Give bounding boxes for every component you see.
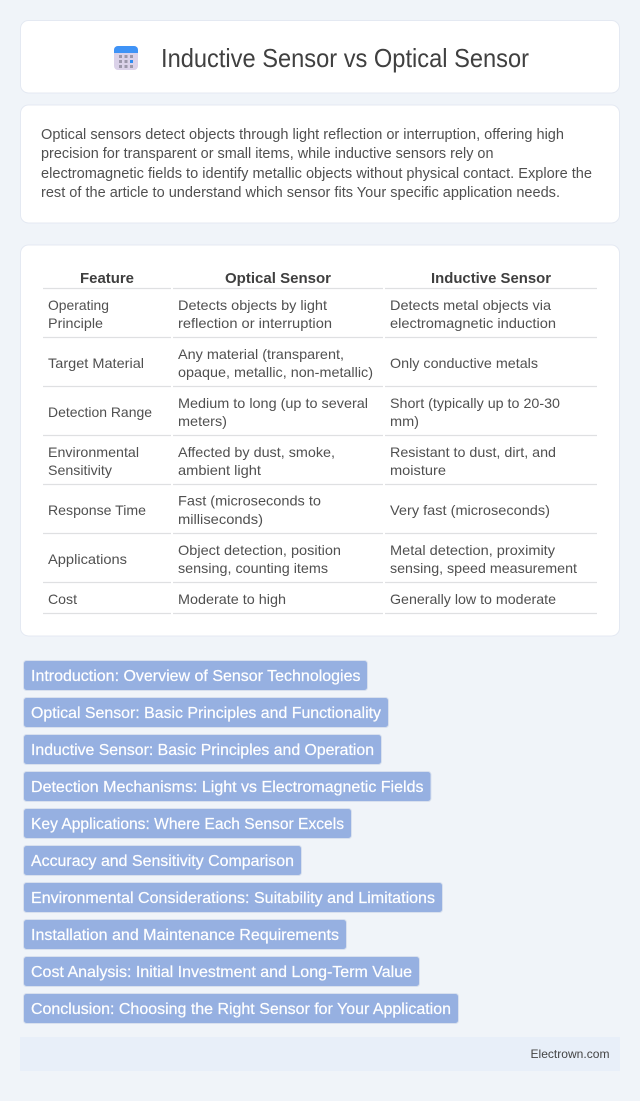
- panel: comparison table: [20, 245, 620, 636]
- row: detection range: Medium to long (up to several: [178, 395, 368, 411]
- row: target material: opaque, metallic, non-metallic): [178, 364, 373, 380]
- table header: Optical Sensor: [225, 270, 331, 287]
- button: accuracy: Accuracy and Sensitivity Comparison: [31, 853, 294, 870]
- table header: Inductive Sensor: [431, 270, 551, 287]
- button: cost analysis: [24, 956, 420, 986]
- row: operating principle: [48, 297, 556, 331]
- row: cost: Moderate to high: [178, 591, 286, 607]
- row: detection range: meters): [178, 413, 227, 429]
- row: environmental sensitivity: ambient light: [178, 462, 261, 478]
- button: installation: Installation and Maintenance Requirements: [31, 927, 339, 944]
- row: applications: sensing, counting items: [178, 560, 328, 576]
- row: applications: Metal detection, proximity: [390, 542, 555, 558]
- button: conclusion: Conclusion: Choosing the Right Sensor for Your Application: [31, 1001, 451, 1018]
- row: environmental sensitivity: [48, 444, 556, 478]
- row: applications: Applications: [48, 551, 127, 567]
- button: environmental: [24, 882, 442, 912]
- row: operating principle: Detects metal objects via: [390, 297, 551, 313]
- row: response time: Fast (microseconds to: [178, 492, 321, 508]
- row: cost: [48, 591, 556, 607]
- row: environmental sensitivity: Environmental: [48, 444, 139, 460]
- button: installation: [24, 920, 346, 950]
- button: introduction: [24, 660, 368, 690]
- row: environmental sensitivity: moisture: [390, 462, 446, 478]
- row: environmental sensitivity: Resistant to dust, dirt, and: [390, 444, 556, 460]
- icon: calendar: [114, 46, 138, 70]
- row: operating principle: electromagnetic induction: [390, 315, 556, 331]
- row: cost: Cost: [48, 591, 77, 607]
- row: detection range: Detection Range: [48, 404, 152, 420]
- row: target material: [48, 346, 538, 380]
- intro text: precision for transparent or small items, while inductive sensors rely on: [41, 145, 494, 162]
- row: operating principle: Principle: [48, 315, 103, 331]
- row: response time: Response Time: [48, 502, 146, 518]
- button: inductive sensor: Inductive Sensor: Basic Principles and Operation: [31, 742, 374, 759]
- row: applications: [48, 542, 577, 576]
- intro text: Optical sensors detect objects through light reflection or interruption, offering high: [41, 126, 564, 143]
- button: key applications: [24, 808, 352, 838]
- row: response time: milliseconds): [178, 511, 263, 527]
- row: response time: Very fast (microseconds): [390, 502, 550, 518]
- button: detection mechanisms: [24, 772, 431, 802]
- panel: introduction: [20, 105, 620, 223]
- row: environmental sensitivity: Sensitivity: [48, 462, 112, 478]
- row: operating principle: Detects objects by light: [178, 297, 327, 313]
- row: response time: [48, 492, 550, 527]
- button: conclusion: [24, 994, 458, 1024]
- intro text: electromagnetic fields to identify metallic objects without physical contact. Explore the: [41, 165, 592, 182]
- row: operating principle: Operating: [48, 297, 109, 313]
- row: detection range: Short (typically up to 20-30: [390, 395, 560, 411]
- row: target material: Any material (transparent,: [178, 346, 344, 362]
- panel: title card: [20, 20, 620, 93]
- row: target material: Only conductive metals: [390, 355, 538, 371]
- footer credit: Electrown.com: [530, 1047, 610, 1061]
- button: accuracy: [24, 846, 302, 876]
- intro text: rest of the article to understand which sensor fits Your specific application needs.: [41, 184, 560, 201]
- row: detection range: mm): [390, 413, 419, 429]
- title: Inductive Sensor vs Optical Sensor: [161, 43, 529, 73]
- table header: Feature: [80, 270, 134, 287]
- button: environmental: Environmental Considerations: Suitability and Limitations: [31, 890, 435, 907]
- button: introduction: Introduction: Overview of Sensor Technologies: [31, 668, 360, 685]
- panel: table of contents buttons: [24, 660, 458, 1024]
- button: key applications: Key Applications: Where Each Sensor Excels: [31, 816, 344, 833]
- button: optical sensor: Optical Sensor: Basic Principles and Functionality: [31, 705, 381, 722]
- row: applications: sensing, speed measurement: [390, 560, 577, 576]
- button: optical sensor: [24, 698, 388, 728]
- footer: [20, 1037, 620, 1071]
- button: inductive sensor: [24, 734, 382, 764]
- row: detection range: [48, 395, 560, 429]
- row: applications: Object detection, position: [178, 542, 341, 558]
- row: environmental sensitivity: Affected by dust, smoke,: [178, 444, 335, 460]
- row: operating principle: reflection or interruption: [178, 315, 332, 331]
- button: detection mechanisms: Detection Mechanisms: Light vs Electromagnetic Fields: [31, 779, 424, 796]
- row: target material: Target Material: [48, 355, 144, 371]
- row: cost: Generally low to moderate: [390, 591, 556, 607]
- table header: [80, 270, 551, 287]
- button: cost analysis: Cost Analysis: Initial Investment and Long-Term Value: [31, 964, 412, 981]
- intro text: [41, 126, 592, 201]
